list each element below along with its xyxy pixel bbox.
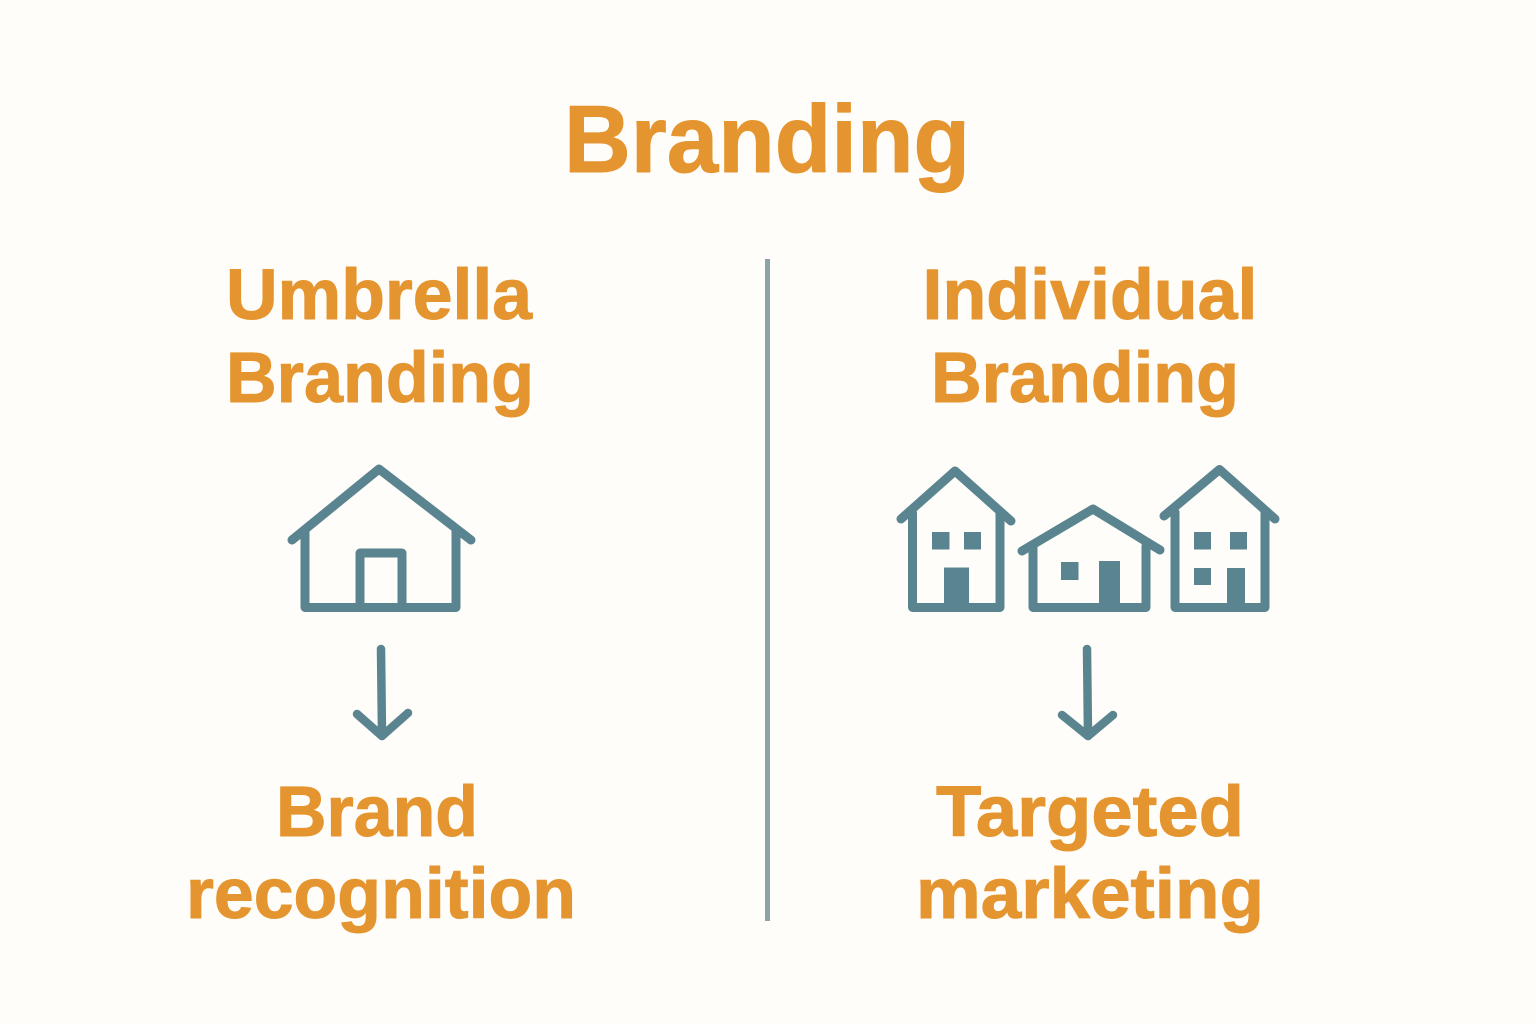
heading: umbrella branding: Branding xyxy=(226,339,534,418)
icon: left house xyxy=(901,471,1011,608)
icon: single house xyxy=(292,469,471,608)
arrow: down to targeted marketing xyxy=(1062,649,1113,736)
text: brand recognition: Brand xyxy=(276,773,478,852)
text: brand recognition xyxy=(186,773,576,934)
text: brand recognition: recognition xyxy=(186,855,576,934)
heading: individual branding: Branding xyxy=(931,339,1239,418)
text: targeted marketing: Targeted xyxy=(936,773,1244,852)
divider xyxy=(765,259,770,921)
icon: right house xyxy=(1164,470,1275,608)
panel: umbrella branding xyxy=(186,256,576,934)
text: targeted marketing: marketing xyxy=(916,855,1264,934)
heading: individual branding: Individual xyxy=(922,256,1258,335)
heading: umbrella branding: Umbrella xyxy=(226,256,533,335)
heading: individual branding xyxy=(922,256,1258,418)
heading: umbrella branding xyxy=(226,256,534,418)
arrow: down to brand recognition xyxy=(357,649,408,736)
text: targeted marketing xyxy=(916,773,1264,934)
title: Branding xyxy=(564,86,970,193)
icon: three houses xyxy=(901,470,1275,608)
icon: middle house xyxy=(1022,509,1160,608)
panel: individual branding xyxy=(901,256,1275,934)
